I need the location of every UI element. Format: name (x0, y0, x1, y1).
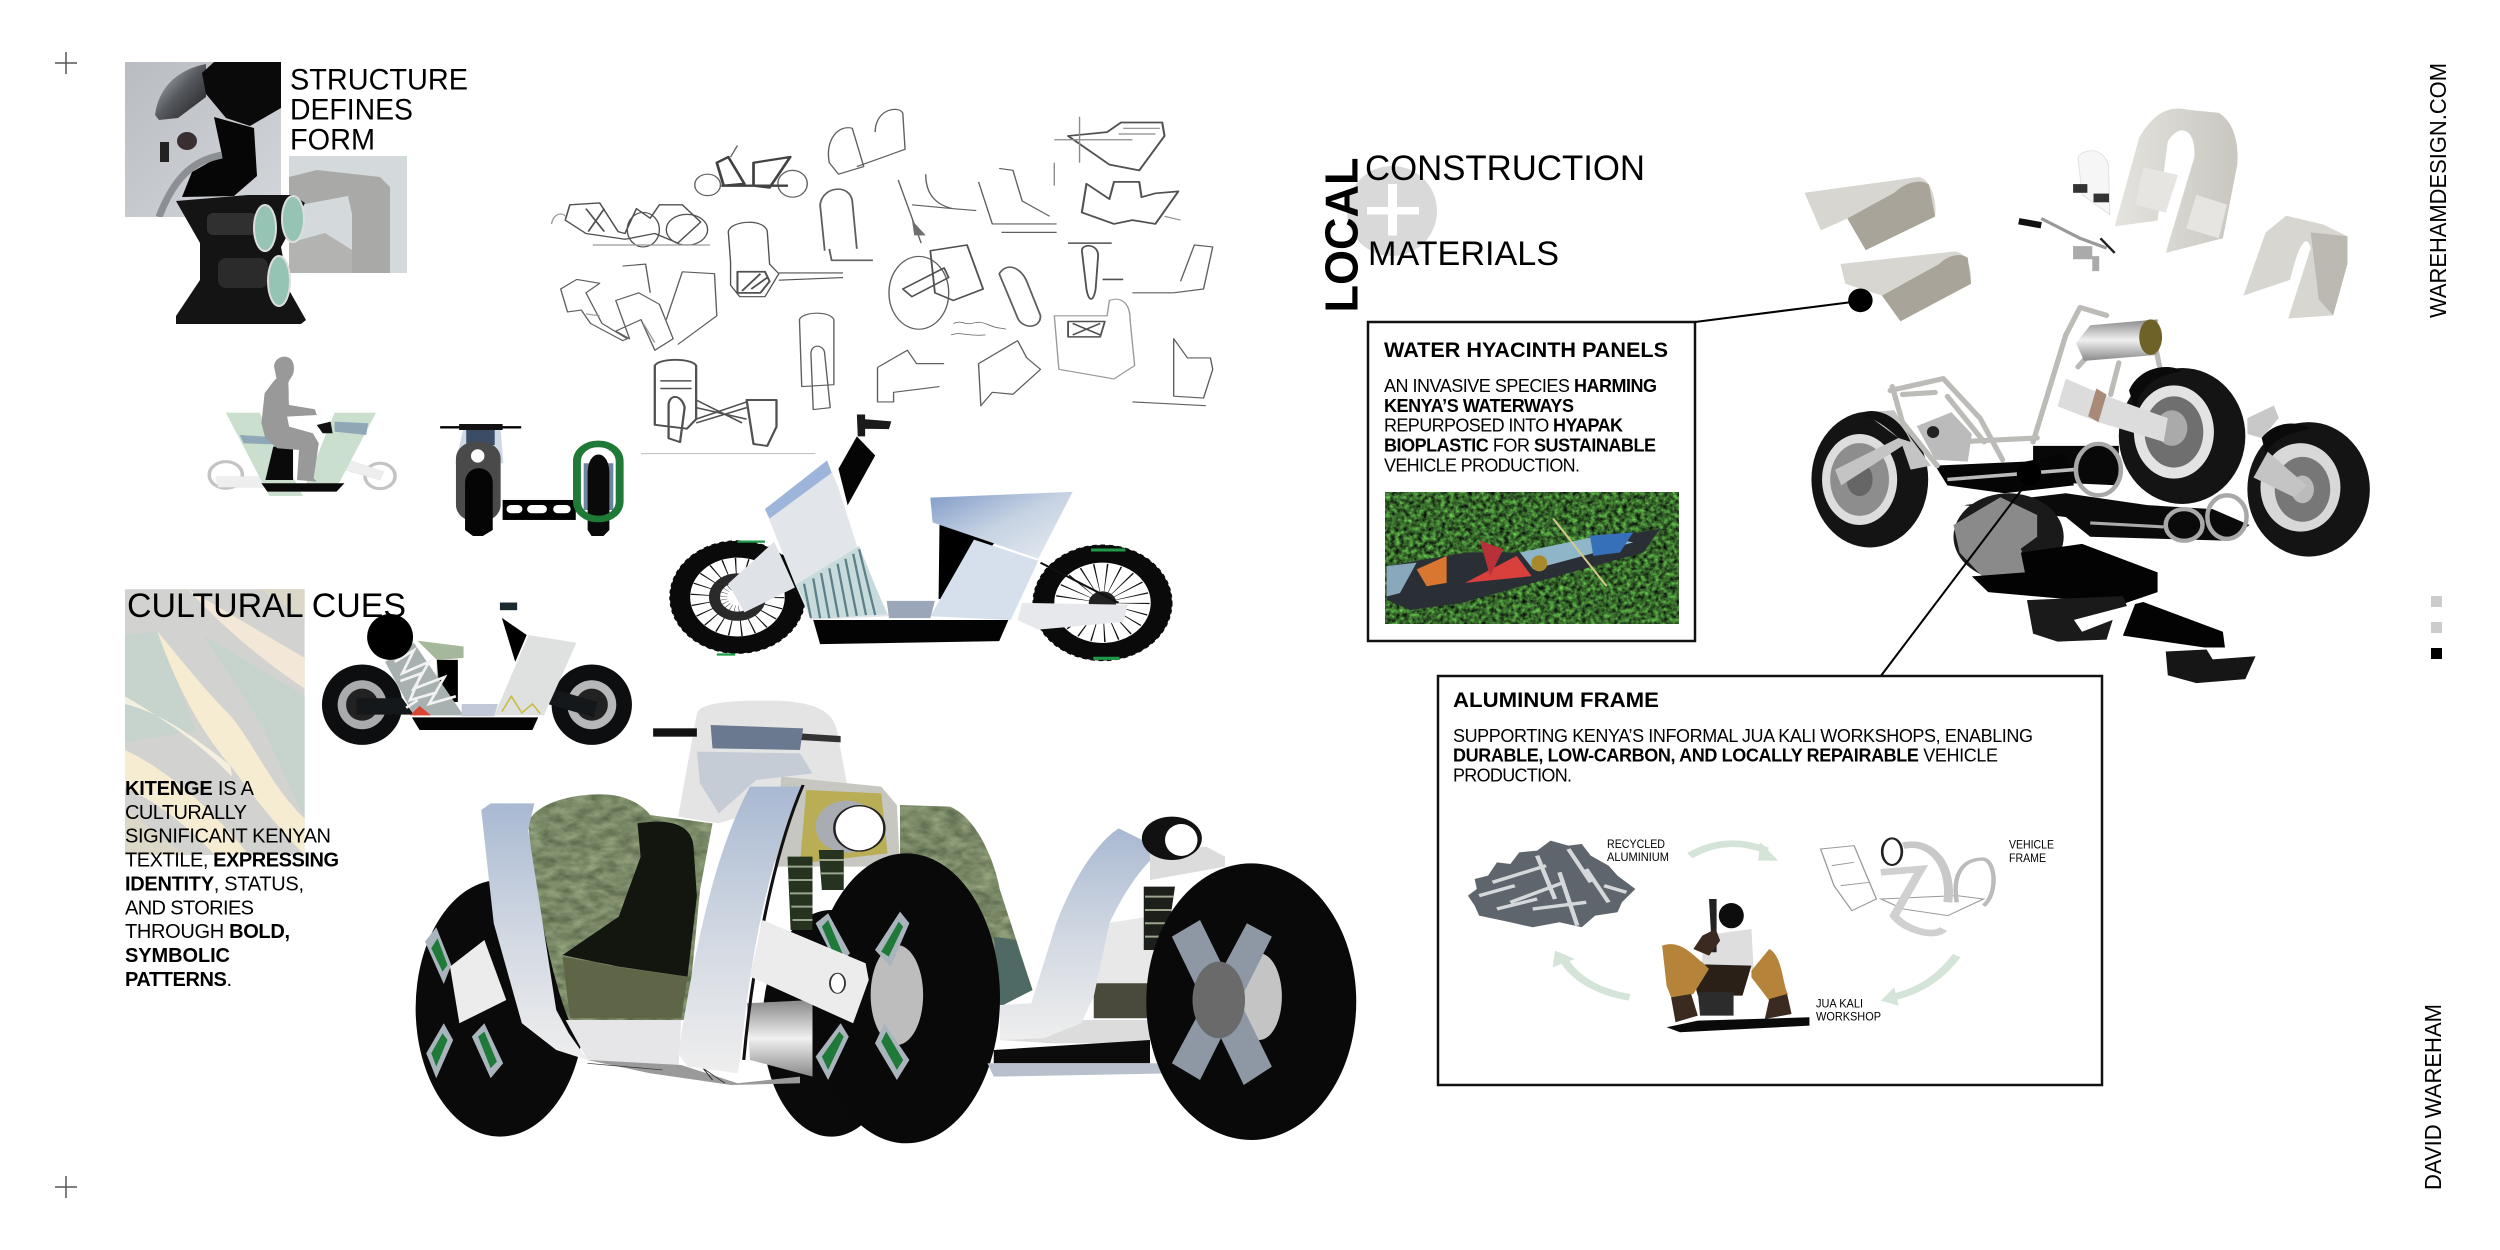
centre tray (747, 1000, 812, 1077)
sketch: small scooter (695, 145, 807, 197)
description text: SUPPORTING KENYA’S INFORMAL JUA KALI WORKSHOPS, ENABLING (1453, 726, 2033, 746)
grey plus badge (1347, 166, 1437, 256)
sketch: seat modules top (828, 109, 905, 174)
photo: dark machined detail (125, 62, 281, 217)
motorcycle side elevation (670, 415, 1171, 660)
arrow: workshop to aluminium (1553, 951, 1630, 997)
rear wheel (1034, 545, 1171, 660)
callout dot on frame (2017, 462, 2041, 485)
rear fender panel (2243, 216, 2347, 319)
text block: kitenge description: TEXTILE, EXPRESSING (125, 850, 339, 872)
sketch: tall module (799, 313, 834, 410)
small windscreen (2073, 151, 2110, 215)
right front wheel (2247, 422, 2370, 557)
photo: silver bracket (289, 156, 407, 273)
sketch: brackets (878, 339, 1213, 406)
hero vehicle three-quarter view (416, 701, 1356, 1143)
vent grille (796, 546, 887, 619)
front body panel (765, 460, 889, 620)
diagram: rider ergonomic side view (209, 357, 395, 496)
left wheel (322, 665, 402, 745)
text block: kitenge description: KITENGE IS A (125, 778, 255, 800)
lower body (566, 1020, 681, 1073)
arrow: aluminium to frame (1690, 842, 1778, 861)
collage: structure photos and black bracket (125, 62, 407, 324)
neck and handlebar (838, 436, 875, 505)
seat tube (2076, 319, 2158, 361)
sketch: upper right seat (1054, 117, 1181, 224)
handlebar assembly (2019, 219, 2115, 271)
callout dot on hyacinth panel (1848, 288, 1873, 312)
front mid wheel (2119, 367, 2245, 504)
text block: kitenge description: IDENTITY, STATUS, (125, 874, 304, 896)
heading: local construction + materials: CONSTRUCTION (1365, 149, 1645, 188)
description text: DURABLE, LOW-CARBON, AND LOCALLY REPAIRABLE VEHICLE (1453, 746, 1998, 766)
text block: kitenge description: THROUGH BOLD, (125, 921, 290, 943)
kitenge patterned panel (385, 643, 464, 715)
heading: structure defines form: STRUCTURE (290, 64, 468, 96)
heading: structure defines form: FORM (290, 124, 375, 156)
rear and front wheels (209, 462, 395, 489)
label: vehicle frame: FRAME (2009, 851, 2046, 865)
lower wheel fender (1953, 493, 2064, 580)
left moss seat (528, 794, 712, 1020)
label: vehicle frame (2009, 838, 2054, 865)
right front wheel (1146, 863, 1356, 1140)
centre front wheel (812, 853, 1000, 1143)
description text: AN INVASIVE SPECIES HARMING (1384, 376, 1657, 396)
sketch: seat module cluster (561, 264, 717, 350)
front shocks (788, 850, 844, 930)
heading: local construction + materials: LOCAL (1316, 158, 1368, 312)
label: jua kali workshop: JUA KALI (1816, 996, 1863, 1010)
left swingarm and fender (1835, 410, 1931, 485)
panel: aluminum frame: ALUMINUM FRAME (1453, 689, 1659, 712)
white patterned panel (494, 635, 576, 715)
white swingarm (750, 920, 869, 1023)
seat and rear panel (939, 522, 999, 599)
label: recycled aluminium: RECYCLED (1607, 837, 1665, 851)
sketch: seat and swingarm (889, 174, 983, 329)
black extrusion with mint ovals (176, 195, 306, 324)
registration cross top left (55, 52, 77, 74)
right wheel (552, 665, 632, 745)
label: jua kali workshop: WORKSHOP (1816, 1010, 1881, 1024)
exploded view of vehicle (1804, 108, 2370, 683)
registration cross bottom left (55, 1176, 77, 1198)
scooter with kitenge pattern (322, 603, 632, 745)
right silver band and tray (988, 828, 1175, 1077)
arrow: frame to workshop (1881, 956, 1957, 1006)
description text: KENYA’S WATERWAYS (1384, 396, 1574, 416)
sketch: hex frame with tail (728, 222, 843, 297)
label: recycled aluminium: ALUMINIUM (1607, 850, 1669, 864)
black seat cylinders and rings (1935, 444, 2249, 541)
centre back wheel (762, 910, 900, 1137)
rear left wheel (416, 880, 584, 1137)
headlight pod (2247, 406, 2279, 438)
heading: cultural cues with textile: CULTURAL CUES (127, 587, 406, 625)
callout dot (367, 614, 413, 660)
large hoop fender (2115, 108, 2238, 253)
label: recycled aluminium (1607, 837, 1669, 864)
vehicle frame line drawing (1821, 838, 1994, 933)
panel: aluminum frame (1438, 676, 2102, 1085)
silver swingarm (2058, 379, 2168, 442)
centre silver band (678, 787, 803, 1073)
left arm (450, 940, 506, 1023)
sketch: oval panel and annotation (951, 267, 1041, 335)
panel: water hyacinth panels: WATER HYACINTH PANELS (1384, 339, 1668, 362)
description text: VEHICLE PRODUCTION. (1384, 456, 1580, 476)
author credit: DAVID WAREHAM (2420, 1004, 2446, 1190)
text block: kitenge description: PATTERNS. (125, 969, 232, 991)
description text (1384, 376, 1657, 476)
floor and rear arm (887, 601, 935, 618)
jua kali worker (1662, 899, 1809, 1032)
description text: BIOPLASTIC FOR SUSTAINABLE (1384, 436, 1656, 456)
sketch: x-braced twin module (641, 360, 816, 454)
concept sketches (551, 109, 1213, 454)
seat and black stem (418, 641, 464, 700)
front wheel (670, 541, 804, 654)
text block: kitenge description: AND STORIES (125, 898, 254, 920)
floor (462, 704, 498, 716)
recycled aluminium pile (1468, 841, 1635, 927)
heading: local construction + materials (1316, 149, 1645, 312)
sketch: side seat line (979, 168, 1057, 232)
front arm (728, 542, 795, 612)
headlight housing (775, 777, 900, 867)
panel: water hyacinth panels (1368, 322, 1695, 641)
bracket (1917, 412, 1972, 462)
sketch: small top view (1068, 243, 1123, 299)
left rear wheel (1811, 411, 1928, 547)
hyacinth panel pair (1804, 177, 1971, 321)
sketch: full vehicle with x wheel (551, 203, 710, 247)
text block: kitenge description: SYMBOLIC (125, 945, 230, 967)
handlebar and stem (653, 725, 841, 813)
heading: structure defines form: DEFINES (290, 94, 413, 126)
label: jua kali workshop (1816, 996, 1881, 1024)
swing arms (356, 689, 598, 717)
text block: kitenge description (125, 778, 339, 991)
callout line to aluminum frame panel (1881, 485, 2025, 676)
heading: cultural cues with textile (125, 587, 406, 855)
description text (1453, 726, 2033, 786)
cycle diagram (1468, 838, 1994, 1032)
black floor trays (1972, 544, 2256, 683)
tubular frame (1890, 307, 2160, 466)
text block: kitenge description: CULTURALLY (125, 802, 247, 824)
rear right moss panel (900, 805, 1032, 1007)
callout line to water hyacinth panel (1695, 301, 1860, 322)
left silver band (481, 803, 588, 1060)
sketch: side panels (1054, 245, 1213, 379)
photo: boats on water hyacinth (1385, 492, 1679, 624)
green V structure (226, 413, 376, 496)
heading: local construction + materials: MATERIALS (1368, 235, 1559, 273)
heading: structure defines form (290, 64, 468, 156)
diagram: top view of vehicle with green wheel ring (440, 424, 620, 536)
windscreen (678, 701, 847, 823)
sketch: hoop (820, 189, 873, 260)
page indicator squares (2431, 596, 2442, 659)
website credit: WAREHAMDESIGN.COM (2425, 63, 2451, 318)
seat and floor (261, 447, 344, 492)
kitenge textile swatch (125, 589, 305, 855)
right shock and headlight (1142, 817, 1225, 950)
description text: REPURPOSED INTO HYAPAK (1384, 416, 1623, 436)
label: vehicle frame: VEHICLE (2009, 838, 2054, 852)
description text: PRODUCTION. (1453, 766, 1572, 786)
rider silhouette (261, 357, 319, 482)
text block: kitenge description: SIGNIFICANT KENYAN (125, 826, 331, 848)
